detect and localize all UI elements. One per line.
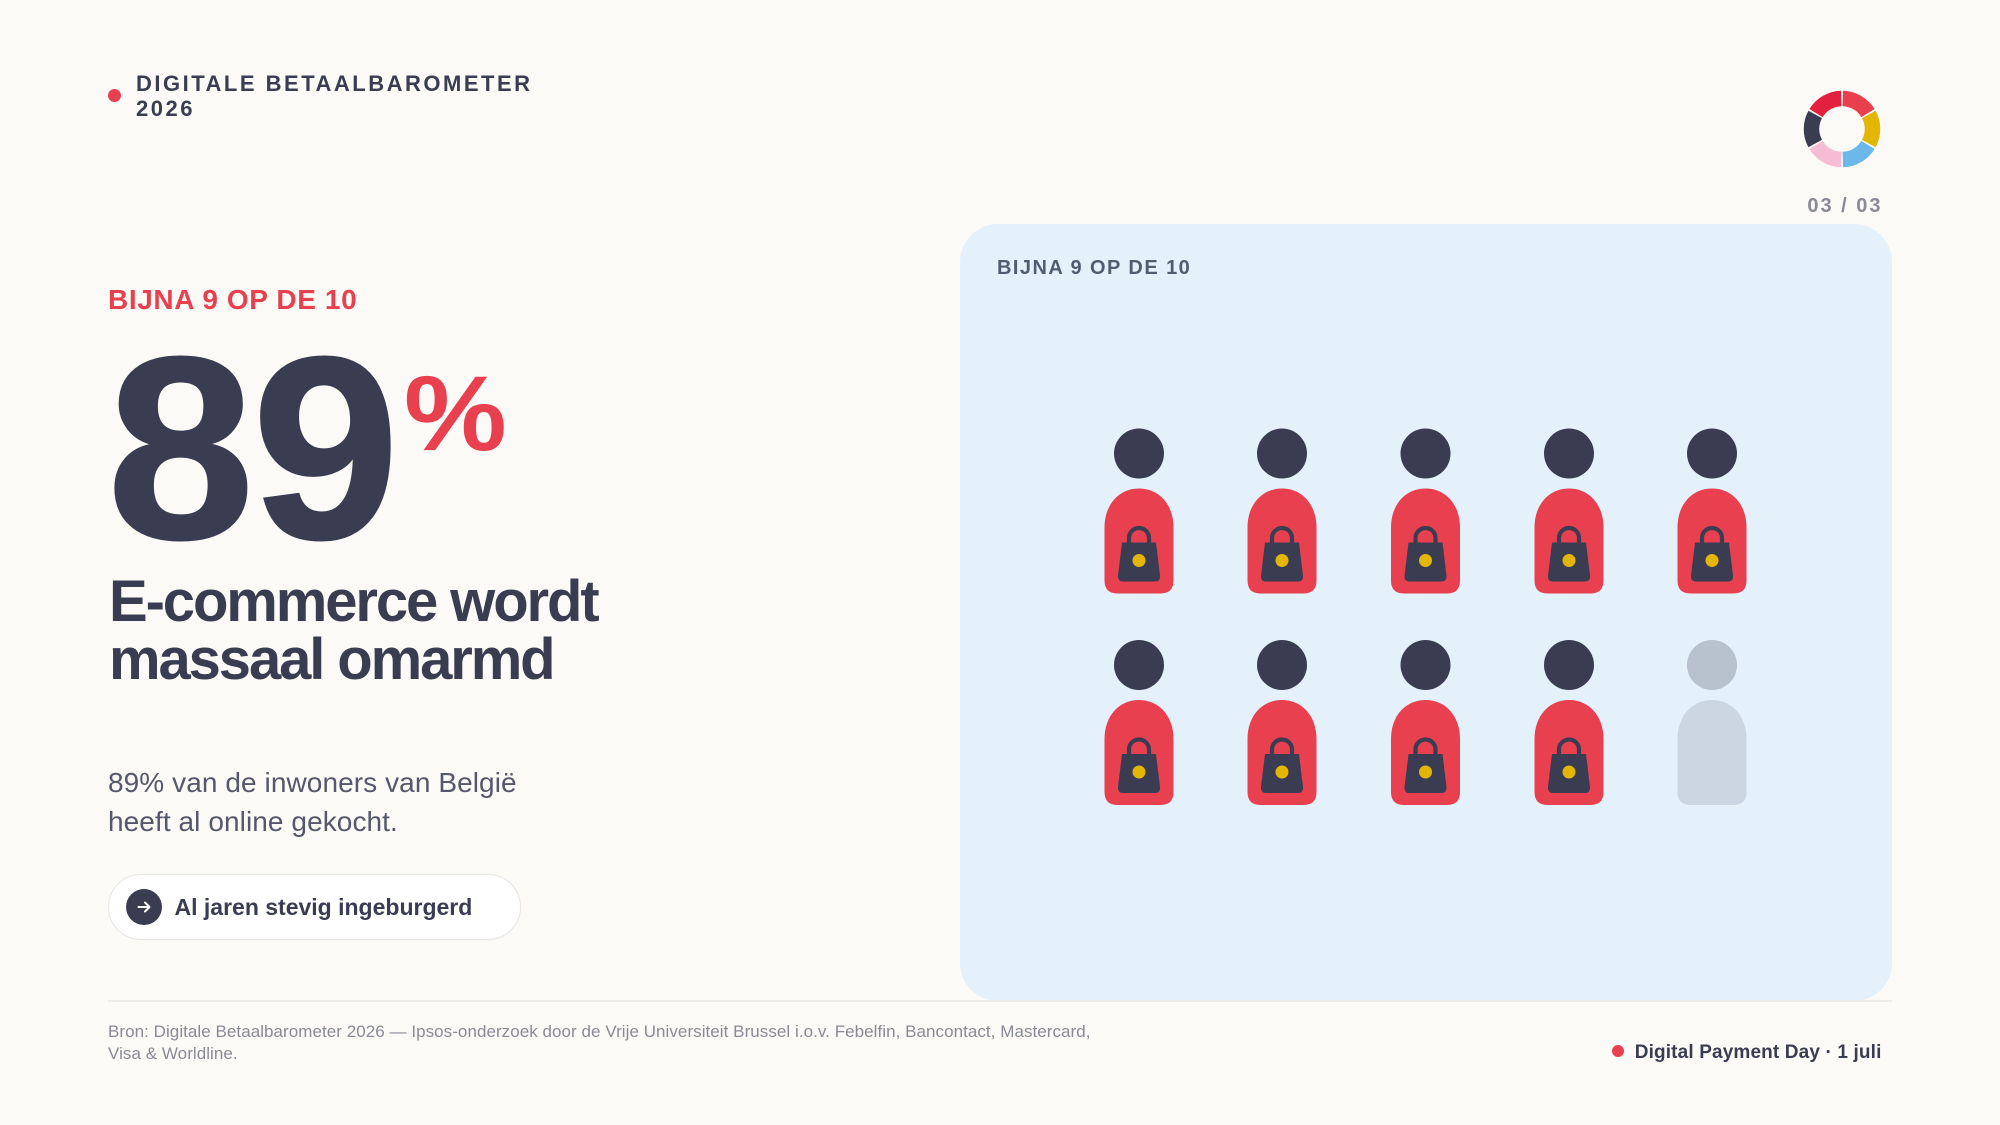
header title <box>136 71 532 121</box>
panel: pictogram <box>960 224 1892 1001</box>
callout pill <box>108 874 521 940</box>
percent sign: % <box>404 353 506 473</box>
person 10 (grey) <box>1678 640 1746 805</box>
page number: 03 / 03 <box>1807 195 1882 217</box>
person 7 <box>1248 640 1316 805</box>
person 1 <box>1104 428 1174 594</box>
person 6 <box>1104 640 1174 805</box>
person 5 <box>1678 428 1746 594</box>
panel label: BIJNA 9 OP DE 10 <box>997 257 1191 279</box>
person 2 <box>1248 428 1316 594</box>
icon: arrow in circle <box>126 889 162 925</box>
source text: Bron: Digitale Betaalbarometer 2026 — Ipsos-onderzoek door de Vrije Universiteit Brussel i.o.v. Febelfin, Bancontact, Mastercard, <box>108 1022 1091 1041</box>
callout text: Al jaren stevig ingeburgerd <box>174 894 472 920</box>
source text <box>108 1022 1091 1062</box>
heading <box>109 569 599 692</box>
icon: donut logo <box>1804 90 1880 168</box>
header title: DIGITALE BETAALBAROMETER <box>136 71 532 96</box>
body text: heeft al online gekocht. <box>108 806 398 837</box>
footer dot <box>1612 1045 1624 1057</box>
person 4 <box>1534 428 1604 594</box>
eyebrow: BIJNA 9 OP DE 10 <box>108 284 357 315</box>
source text: Visa & Worldline. <box>108 1044 238 1062</box>
heading: massaal omarmd <box>109 627 554 692</box>
footer label: Digital Payment Day · 1 juli <box>1635 1042 1882 1063</box>
person 9 <box>1534 640 1604 805</box>
person 3 <box>1391 428 1460 594</box>
heading: E-commerce wordt <box>109 569 598 634</box>
header title: 2026 <box>136 96 195 121</box>
person 8 <box>1391 640 1460 805</box>
big number: 89 <box>107 304 397 594</box>
body text <box>108 767 517 837</box>
header dot <box>108 89 121 102</box>
body text: 89% van de inwoners van België <box>108 767 517 798</box>
